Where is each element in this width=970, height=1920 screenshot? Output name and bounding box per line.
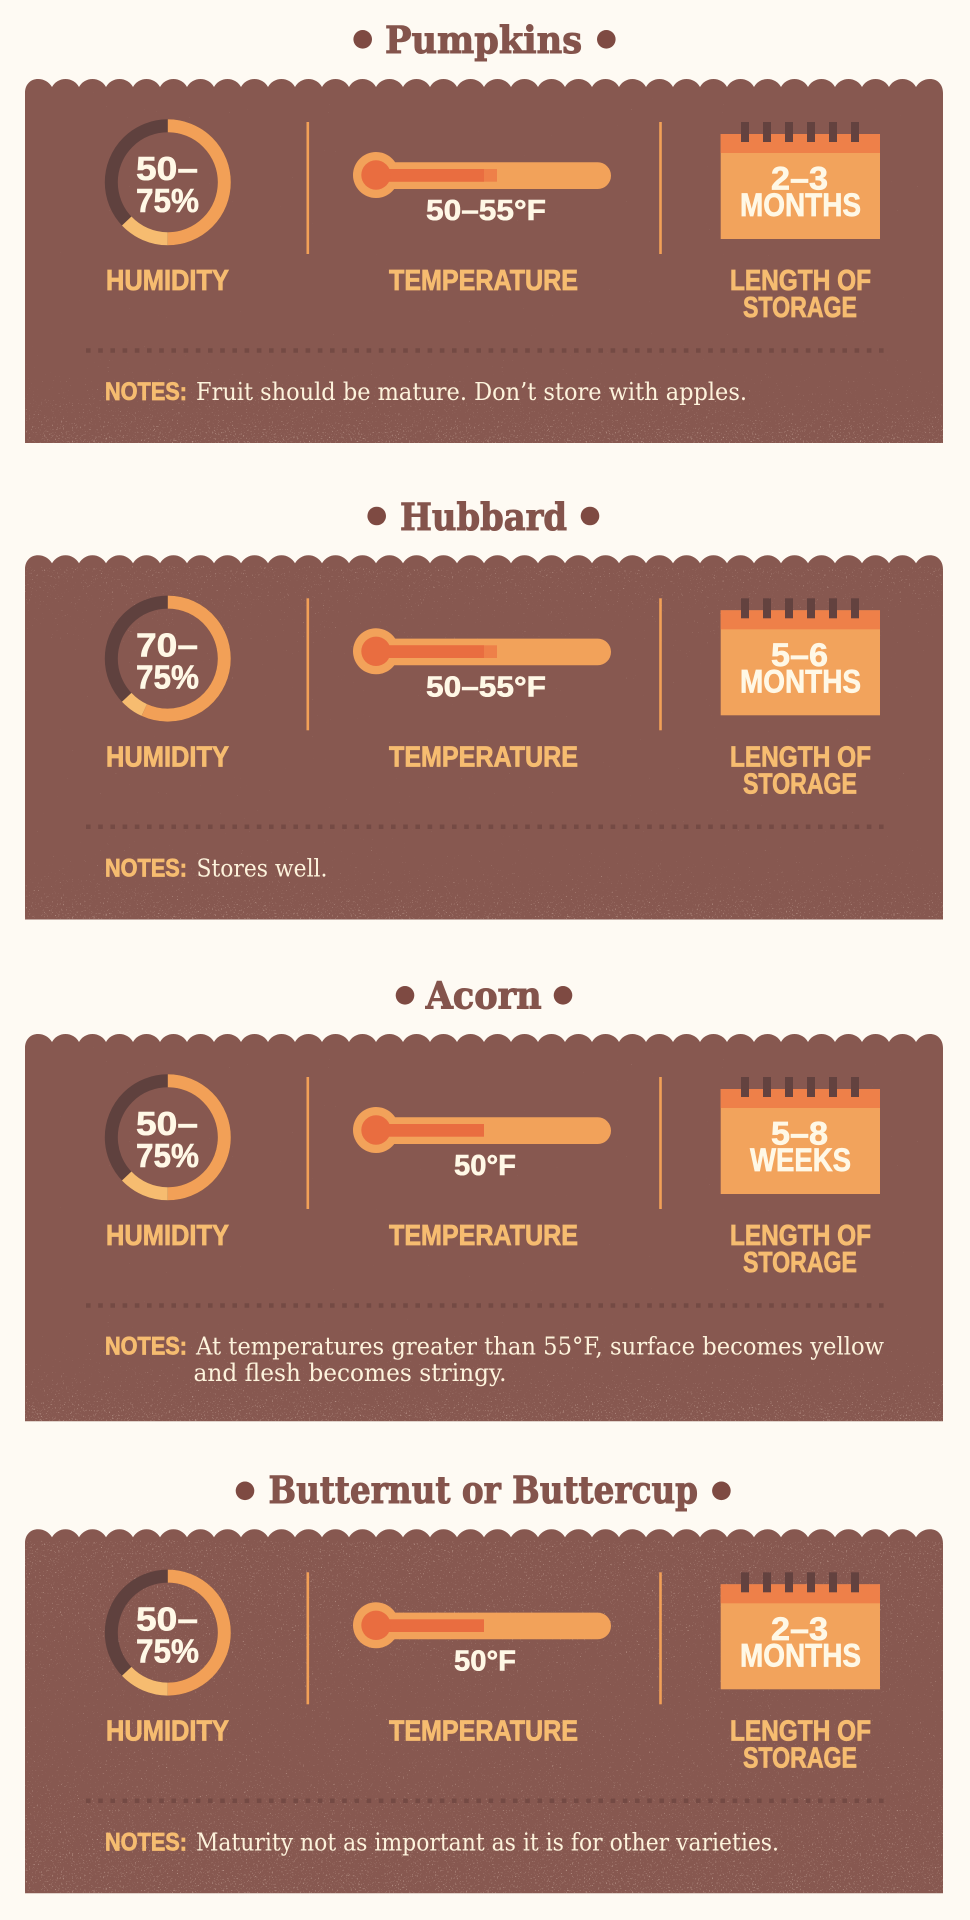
- donut: humidity 50-75%: 50–: [136, 1105, 198, 1142]
- heading: Butternut or Buttercup: Butternut or Buttercup: [268, 1468, 698, 1512]
- donut: humidity 70-75%: 75%: [136, 658, 199, 695]
- heading: Acorn: [396, 973, 572, 1017]
- label: length of storage: LENGTH OF: [730, 265, 871, 297]
- panel: Butternut or Buttercup: [25, 1529, 943, 1893]
- panel: Acorn: [25, 1034, 943, 1421]
- divider left: [306, 122, 309, 254]
- divider left: [306, 1572, 309, 1704]
- calendar: 5-6 months: [721, 598, 880, 715]
- divider left: [306, 598, 309, 730]
- label: length of storage: STORAGE: [743, 292, 857, 324]
- divider right: [659, 598, 662, 730]
- label: length of storage: STORAGE: [743, 768, 857, 800]
- notes: [105, 1332, 884, 1387]
- label: length of storage: [730, 741, 871, 800]
- thermometer: 50F: [353, 1107, 611, 1182]
- label: length of storage: [730, 265, 871, 324]
- donut: humidity 70-75%: 70–: [136, 626, 198, 663]
- calendar: 2-3 months: MONTHS: [740, 1637, 861, 1673]
- label: length of storage: LENGTH OF: [730, 1220, 871, 1252]
- calendar: 2-3 months: 2–3: [771, 1611, 828, 1647]
- heading: Pumpkins: Pumpkins: [385, 18, 582, 62]
- thermometer: 50F: 50°F: [454, 1150, 516, 1182]
- donut: humidity 70-75%: [111, 602, 224, 715]
- calendar: 5-6 months: MONTHS: [740, 663, 861, 699]
- heading: Acorn: Acorn: [425, 973, 542, 1017]
- notes: NOTES:: [105, 1332, 187, 1360]
- calendar: 5-8 weeks: 5–8: [771, 1116, 828, 1152]
- thermometer: 50F: [353, 1602, 611, 1677]
- thermometer: 50F: 50°F: [454, 1645, 516, 1677]
- label: length of storage: LENGTH OF: [730, 741, 871, 773]
- thermometer: 50-55F: [353, 628, 611, 703]
- label: humidity: HUMIDITY: [106, 1715, 229, 1747]
- label: length of storage: STORAGE: [743, 1247, 857, 1279]
- label: temperature: TEMPERATURE: [389, 741, 578, 773]
- calendar: 5-6 months: 5–6: [771, 637, 828, 673]
- notes: and flesh becomes stringy.: [194, 1358, 506, 1387]
- donut: humidity 50-75%: 75%: [136, 182, 199, 219]
- label: length of storage: [730, 1220, 871, 1279]
- notes: NOTES:: [105, 1828, 187, 1856]
- calendar: 5-8 weeks: WEEKS: [750, 1142, 851, 1178]
- donut: humidity 50-75%: 75%: [136, 1137, 199, 1174]
- donut: humidity 50-75%: 75%: [136, 1632, 199, 1669]
- notes: Fruit should be mature. Don’t store with apples.: [196, 377, 747, 406]
- calendar: 2-3 months: MONTHS: [740, 187, 861, 223]
- panel: Pumpkins: [25, 79, 943, 443]
- label: temperature: TEMPERATURE: [389, 1220, 578, 1252]
- divider right: [659, 1077, 662, 1209]
- thermometer: 50-55F: 50–55°F: [426, 195, 546, 227]
- notes: At temperatures greater than 55°F, surface becomes yellow: [195, 1332, 884, 1360]
- label: length of storage: STORAGE: [743, 1742, 857, 1774]
- panel: Hubbard: [25, 555, 943, 920]
- label: temperature: TEMPERATURE: [389, 265, 578, 297]
- calendar: 2-3 months: [721, 122, 880, 239]
- donut: humidity 50-75%: 50–: [136, 1600, 198, 1637]
- label: length of storage: LENGTH OF: [730, 1715, 871, 1747]
- notes: [105, 853, 328, 882]
- divider right: [659, 122, 662, 254]
- divider left: [306, 1077, 309, 1209]
- notes: NOTES:: [105, 854, 187, 882]
- notes: NOTES:: [105, 378, 187, 406]
- label: humidity: HUMIDITY: [106, 741, 229, 773]
- donut: humidity 50-75%: 50–: [136, 150, 198, 187]
- donut: humidity 50-75%: [111, 1081, 224, 1194]
- notes: Maturity not as important as it is for other varieties.: [196, 1827, 779, 1856]
- label: humidity: HUMIDITY: [106, 1220, 229, 1252]
- calendar: 5-8 weeks: [721, 1077, 880, 1194]
- calendar: 2-3 months: [721, 1572, 880, 1689]
- label: temperature: TEMPERATURE: [389, 1715, 578, 1747]
- thermometer: 50-55F: 50–55°F: [426, 671, 546, 703]
- calendar: 2-3 months: 2–3: [771, 160, 828, 196]
- divider right: [659, 1572, 662, 1704]
- heading: Hubbard: Hubbard: [400, 495, 567, 539]
- donut: humidity 50-75%: [111, 1576, 224, 1689]
- donut: humidity 50-75%: [111, 126, 224, 239]
- label: humidity: HUMIDITY: [106, 265, 229, 297]
- notes: Stores well.: [196, 853, 328, 882]
- label: length of storage: [730, 1715, 871, 1774]
- thermometer: 50-55F: [353, 152, 611, 227]
